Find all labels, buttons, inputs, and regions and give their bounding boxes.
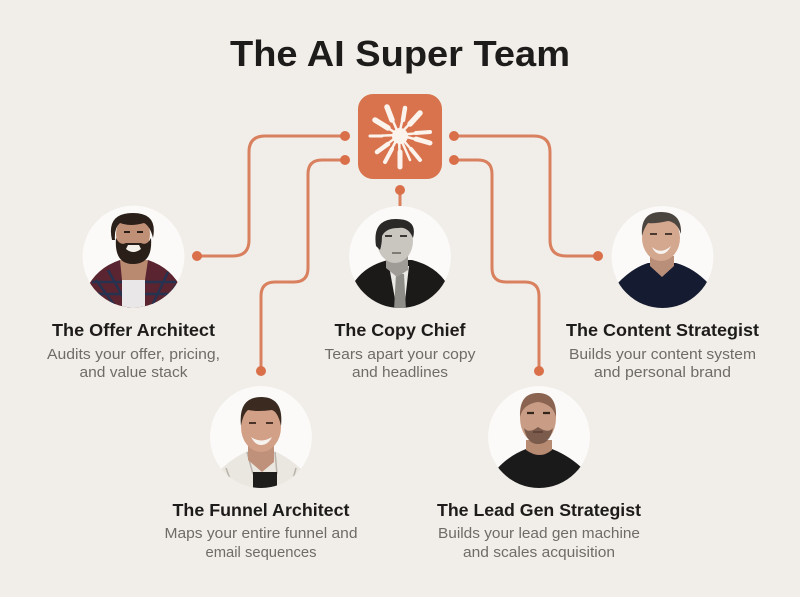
portrait: the lead gen strategist — [488, 386, 590, 492]
portrait: the funnel architect — [210, 386, 312, 492]
connector: lead gen strategist — [449, 155, 544, 376]
description: Maps your entire funnel and — [164, 526, 358, 542]
connector: copy chief — [395, 185, 405, 206]
panel: the offer architect — [47, 206, 220, 381]
panel: the copy chief — [324, 206, 476, 381]
description: Audits your offer, pricing, — [47, 347, 220, 363]
portrait: the offer architect — [82, 206, 184, 312]
connector: offer architect — [192, 131, 350, 261]
name: The Copy Chief — [334, 320, 466, 340]
panel: the lead gen strategist — [437, 386, 641, 561]
name: The Content Strategist — [566, 320, 759, 340]
panel: the content strategist: and personal brand — [594, 365, 731, 381]
name: The Offer Architect — [52, 320, 215, 340]
description: Tears apart your copy — [324, 347, 476, 363]
panel: the content strategist — [566, 206, 759, 381]
description: Builds your lead gen machine — [438, 526, 640, 542]
panel: the copy chief: and headlines — [352, 365, 448, 381]
panel: the lead gen strategist: and scales acquisition — [463, 545, 615, 561]
connector: funnel architect — [256, 155, 350, 376]
portrait: the copy chief — [349, 206, 451, 312]
portrait: the content strategist — [612, 206, 714, 312]
title: The AI Super Team — [230, 33, 570, 74]
icon: central AI starburst — [358, 94, 442, 179]
panel: the funnel architect: email sequences — [206, 545, 316, 561]
name: The Lead Gen Strategist — [437, 500, 641, 520]
connector: content strategist — [449, 131, 603, 261]
panel: the offer architect: and value stack — [80, 365, 188, 381]
name: The Funnel Architect — [172, 500, 350, 520]
panel: the funnel architect — [164, 386, 358, 561]
description: Builds your content system — [569, 347, 756, 363]
